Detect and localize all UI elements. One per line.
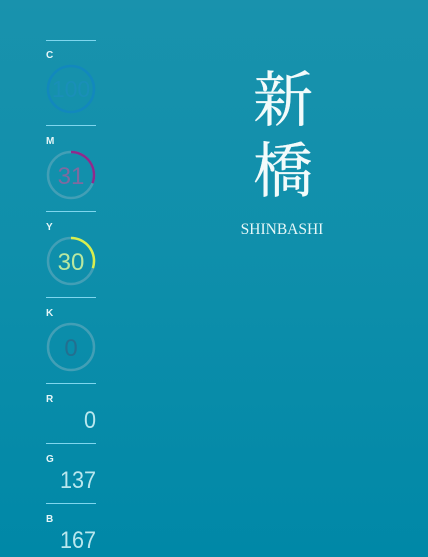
label: R: R — [46, 394, 53, 405]
title: 新橋: 新 — [253, 68, 313, 134]
label: C: C — [46, 50, 53, 61]
gauge: Y 30 — [46, 236, 96, 286]
gauge: C 100: 100 — [52, 76, 90, 102]
label: B: B — [46, 514, 53, 525]
gauge: K 0 — [46, 322, 96, 372]
title: 新橋: 橋 — [253, 139, 313, 205]
title: 新橋 — [253, 68, 313, 205]
panel: colour values — [46, 40, 96, 504]
value: R 0: 0 — [84, 407, 96, 434]
gauge: Y 30: 30 — [58, 249, 84, 276]
gauge: M 31 — [46, 150, 96, 200]
gauge: K 0: 0 — [64, 335, 78, 362]
label: G: G — [46, 454, 54, 465]
gauge: C 100 — [47, 65, 95, 113]
label: Y: Y — [46, 222, 53, 233]
label: M: M — [46, 136, 54, 147]
label: K: K — [46, 308, 53, 319]
subtitle: SHINBASHI: SHINBASHI — [241, 221, 323, 238]
value: G 137: 137 — [60, 467, 96, 494]
value: B 167: 167 — [60, 527, 96, 554]
gauge: M 31: 31 — [58, 163, 84, 190]
